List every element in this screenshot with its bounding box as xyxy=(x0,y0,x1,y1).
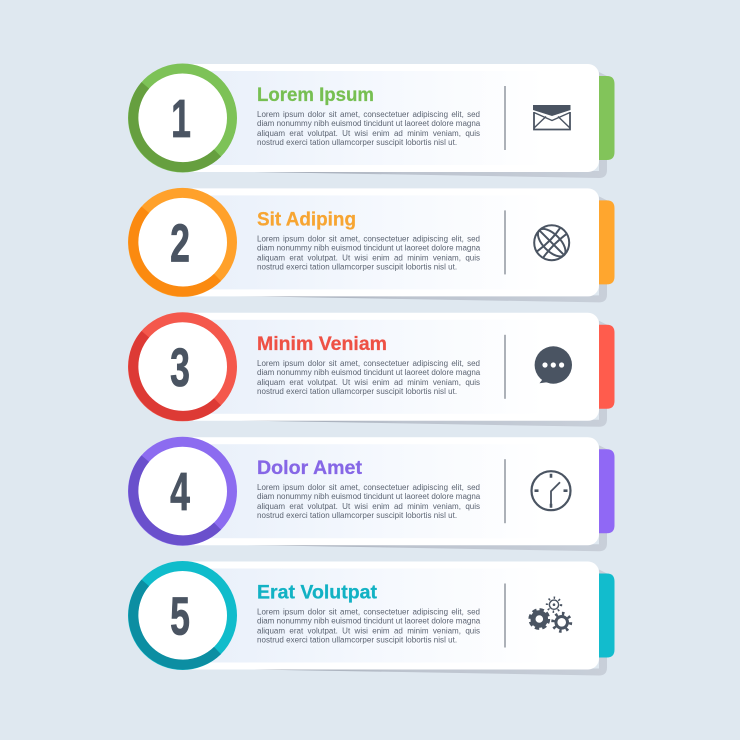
body text 4: Lorem ipsum dolor sit amet, consectetuer adipiscing elit, sed xyxy=(257,483,480,492)
icon: globe xyxy=(533,224,570,261)
heading 3: Minim Veniam xyxy=(257,333,387,355)
body text 5: aliquam erat volutpat. Ut wisi enim ad minim veniam, quis xyxy=(257,626,480,635)
colour tab 2 xyxy=(599,200,614,284)
body text 2 xyxy=(257,234,483,274)
card shadow 4 xyxy=(200,445,607,551)
card 3 xyxy=(183,313,599,421)
colour tab 1 xyxy=(599,76,614,160)
number 3: 3 xyxy=(170,337,190,398)
body text 3: Lorem ipsum dolor sit amet, consectetuer adipiscing elit, sed xyxy=(257,358,480,367)
card inner band 2 xyxy=(205,195,545,289)
card inner band 4 xyxy=(205,444,545,538)
divider 4 xyxy=(504,459,506,523)
card shadow 3 xyxy=(200,321,607,427)
icon: clock xyxy=(532,471,570,510)
number 2: 2 xyxy=(170,213,190,273)
colour tab 4 xyxy=(599,449,614,533)
divider 2 xyxy=(504,210,506,274)
divider 5 xyxy=(504,584,506,648)
body text 5: diam nonummy nibh euismod tincidunt ut laoreet dolore magna xyxy=(257,617,480,626)
card 4 xyxy=(183,437,599,545)
number ring 2 xyxy=(133,193,232,292)
card inner band 5 xyxy=(205,568,545,662)
colour tab 3 xyxy=(599,325,614,409)
icon: gears xyxy=(530,598,570,631)
body text 4 xyxy=(257,483,483,523)
heading 5: Erat Volutpat xyxy=(257,582,377,604)
number ring 3 xyxy=(133,317,232,416)
heading 1: Lorem Ipsum xyxy=(257,84,374,106)
body text 2: Lorem ipsum dolor sit amet, consectetuer adipiscing elit, sed xyxy=(257,234,480,243)
icon: chat bubble xyxy=(535,346,572,384)
number 5: 5 xyxy=(170,586,190,646)
card inner band 3 xyxy=(205,320,545,414)
body text 1 xyxy=(257,110,483,150)
body text 4: nostrud exerci tation ullamcorper suscipit lobortis nisl ut. xyxy=(257,511,457,520)
card inner band 1 xyxy=(205,71,545,165)
row 4: Dolor Amet xyxy=(133,437,614,551)
body text 1: Lorem ipsum dolor sit amet, consectetuer adipiscing elit, sed xyxy=(257,110,480,119)
body text 3: aliquam erat volutpat. Ut wisi enim ad minim veniam, quis xyxy=(257,377,480,386)
body text 4: aliquam erat volutpat. Ut wisi enim ad minim veniam, quis xyxy=(257,502,480,511)
heading 2: Sit Adiping xyxy=(257,208,356,230)
body text 3: nostrud exerci tation ullamcorper suscipit lobortis nisl ut. xyxy=(257,387,457,396)
card shadow 5 xyxy=(200,570,607,676)
number 4: 4 xyxy=(170,462,190,522)
card 5 xyxy=(183,562,599,670)
body text 5: Lorem ipsum dolor sit amet, consectetuer adipiscing elit, sed xyxy=(257,607,480,616)
body text 1: nostrud exerci tation ullamcorper suscipit lobortis nisl ut. xyxy=(257,138,457,147)
body text 5: nostrud exerci tation ullamcorper suscipit lobortis nisl ut. xyxy=(257,636,457,645)
body text 3 xyxy=(257,358,483,398)
number ring 5 xyxy=(133,566,232,665)
heading 4: Dolor Amet xyxy=(257,457,362,479)
row 1: Lorem Ipsum xyxy=(133,64,614,178)
number 1: 1 xyxy=(171,89,191,149)
row 2: Sit Adiping xyxy=(133,188,614,302)
colour tab 5 xyxy=(599,574,614,658)
body text 1: aliquam erat volutpat. Ut wisi enim ad minim veniam, quis xyxy=(257,129,480,138)
body text 3: diam nonummy nibh euismod tincidunt ut laoreet dolore magna xyxy=(257,368,480,377)
body text 5 xyxy=(257,607,483,647)
card shadow 1 xyxy=(200,72,607,178)
body text 2: aliquam erat volutpat. Ut wisi enim ad minim veniam, quis xyxy=(257,253,480,262)
body text 2: nostrud exerci tation ullamcorper suscipit lobortis nisl ut. xyxy=(257,262,457,271)
row 5: Erat Volutpat xyxy=(133,562,614,676)
card shadow 2 xyxy=(200,196,607,302)
card 2 xyxy=(183,188,599,296)
divider 1 xyxy=(504,86,506,150)
icon: envelope xyxy=(533,105,570,130)
divider 3 xyxy=(504,335,506,399)
number ring 1 xyxy=(133,68,232,168)
number ring 4 xyxy=(133,442,232,541)
body text 1: diam nonummy nibh euismod tincidunt ut laoreet dolore magna xyxy=(257,119,480,128)
body text 2: diam nonummy nibh euismod tincidunt ut laoreet dolore magna xyxy=(257,243,480,252)
row 3: Minim Veniam xyxy=(133,313,614,427)
card 1 xyxy=(183,64,599,172)
body text 4: diam nonummy nibh euismod tincidunt ut laoreet dolore magna xyxy=(257,492,480,501)
